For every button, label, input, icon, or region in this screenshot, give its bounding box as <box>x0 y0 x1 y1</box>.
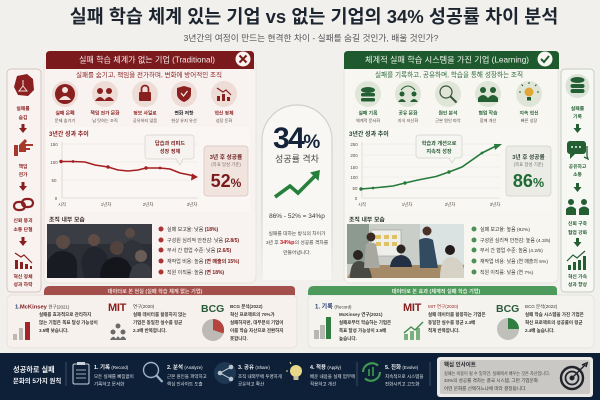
label: hiding: 실패를 <box>16 105 30 112</box>
icon: hiding failure <box>14 74 34 96</box>
label: stagnation: 성과 하락 <box>14 281 33 288</box>
label: share: 소통 <box>573 171 582 178</box>
study: MIT: 2.3배 반복합니다. <box>133 327 167 334</box>
banner: learning <box>308 286 557 295</box>
stat card: 86%: 86% <box>513 171 544 191</box>
insight box: 핵심 인사이트 <box>444 360 476 368</box>
principle 5: evolve: 지속적으로 시스템을 <box>385 373 424 380</box>
label: innovation: 성과 향상 <box>568 281 588 288</box>
callout: learning growth: 학습과 개선으로 <box>422 139 457 147</box>
icon: rising arrow <box>275 170 320 197</box>
principle 3: share: 3. 공유 (Share) <box>238 364 270 371</box>
arrow <box>19 124 27 133</box>
arrow <box>574 183 582 192</box>
callout: traditional stagnation: 답습과 리피드 <box>155 139 185 147</box>
label: blame: 전가 <box>19 171 28 178</box>
formula: 86% - 52% = 34%p <box>269 213 325 220</box>
icon labels: traditional: 공유하지 않음 <box>133 117 157 124</box>
explanation: 실패를 대하는 방식의 차이가 <box>269 230 326 237</box>
title: 실패 학습 체계 있는 기업 vs 없는 기업의 34% 성공률 차이 분석 <box>70 6 558 27</box>
label: stagnation: 혁신 정체 <box>14 273 32 280</box>
icon labels: learning: 지속 혁신 <box>520 110 538 116</box>
study: McKinsey: 높습니다. <box>339 335 357 342</box>
study: McKinsey: 않는 기업은 목표 달성 가능성이 <box>39 319 98 326</box>
stat card: 52%: (목표 달성 기준) <box>211 161 241 168</box>
data panel: traditional <box>7 286 297 348</box>
study: BCG: BCG 분석(2022) <box>230 303 263 310</box>
label: hiding: 숨김 <box>19 114 27 121</box>
label: share: 공유하고 <box>569 163 587 170</box>
icon labels: learning: 공유 문화 <box>398 110 418 116</box>
label: trust breakdown: 신뢰 붕괴 <box>14 217 32 224</box>
list: learning indicators: 부서 간 협업 수준: 높음 (4.2/5) <box>480 247 543 254</box>
study: McKinsey: 1. 기록 (Record) <box>315 302 352 310</box>
icon labels: learning: 협업 학습 <box>478 110 498 116</box>
study: McKinsey: 실패를 효과적으로 관리하지 <box>39 311 91 318</box>
chart: learning performance: 50 <box>353 186 358 191</box>
icon: two people <box>566 199 589 215</box>
icon labels: learning: 지식 자산화 <box>398 117 418 124</box>
chart: learning performance: 100 <box>350 175 358 180</box>
list: traditional indicators: 실패 보고율: 낮음 (18%) <box>167 226 218 233</box>
banner: traditional: 데이터로 본 현실 (실패 학습 체계 없는 기업) <box>108 287 203 295</box>
tagline: 실패를 숨기고, 책임을 전가하며, 변화에 방어적인 조직 <box>76 70 222 79</box>
study: McKinsey: McKinsey 연구(2021) <box>339 311 383 318</box>
list: traditional indicators: 재작업 비용: 높음 (연 매출의 15%) <box>167 258 240 265</box>
icon labels: learning: 근본 원인 파악 <box>435 117 461 124</box>
icon labels: traditional <box>55 110 234 124</box>
principle 4: apply: 4. 적용 (Apply) <box>310 363 342 371</box>
footer title: 성공하로 실패 <box>13 365 55 374</box>
center: success gap arch <box>262 105 332 280</box>
label: blame: 책임 <box>19 163 27 170</box>
chart: learning performance: 1년차 <box>402 201 412 208</box>
banner: learning: 데이터로 본 효과 (체계적 실패 학습 기업) <box>392 287 481 295</box>
chart: learning performance: 2년차 <box>445 201 455 208</box>
big number 34%: 34% <box>273 122 320 155</box>
study: McKinsey <box>13 304 98 340</box>
icon labels: learning: 체계적 문서화 <box>356 117 380 124</box>
stat card: 52%: 3년 후 성공률 <box>210 153 242 161</box>
principle 2: analyze: 근본 원인을 파악하고 <box>167 373 207 380</box>
arrow <box>574 238 582 247</box>
callout: traditional stagnation <box>145 135 194 165</box>
study: McKinsey: 실패로부터 학습하는 기업은 <box>339 319 391 326</box>
insight box: 어떤 문화를 선택하느냐에 따라 결정됩니다. <box>444 385 526 392</box>
chart: traditional performance: 150 <box>50 142 58 147</box>
insight box: 실패는 비용이 될 수 있지만, 실패에서 배우는 것은 자산입니다. <box>444 370 550 377</box>
list: traditional indicators <box>158 226 240 276</box>
principle 2: analyze: 2. 분석 (Analyze) <box>167 363 203 371</box>
panel: traditional company <box>44 51 256 283</box>
principle 5: evolve <box>363 363 424 388</box>
panel header: traditional <box>46 51 254 69</box>
study: McKinsey: 1.McKinsey 연구(2021) <box>15 304 70 310</box>
callout: learning growth <box>416 135 462 163</box>
data panel: learning <box>308 286 594 348</box>
label: trust breakdown: 소통 단절 <box>14 226 33 233</box>
icon labels: traditional: 정보 사일로 <box>133 110 157 116</box>
chart: traditional performance: 3년간 성과 추이 <box>49 130 89 138</box>
principle 1: record: 1. 기록 (Record) <box>94 363 129 371</box>
callout: traditional stagnation: 성장 정체 <box>160 147 180 155</box>
chart: traditional performance: 1년차 <box>101 201 111 208</box>
icon labels: traditional: 실패 은폐 <box>56 110 75 116</box>
study: McKinsey: 3.5배 낮습니다. <box>39 327 68 334</box>
icon: target <box>561 363 587 389</box>
footer title: 문화의 5가지 원칙 <box>13 376 61 385</box>
chart: learning performance: 시작 <box>358 201 366 208</box>
principle 3: share: 공유하고 확산 <box>238 380 264 388</box>
chart: learning performance: 150 <box>350 165 358 170</box>
label: trust breakdown <box>14 217 33 233</box>
icon: chat bubbles <box>567 141 588 159</box>
footer title <box>13 365 61 385</box>
principle 3: share: 조직 내외부에 투명하게 <box>238 373 282 380</box>
photo: stressed team <box>47 224 152 278</box>
section: learning organization <box>347 216 551 278</box>
principle 1: record: 기록하고 문서화 <box>94 380 124 388</box>
principle 2: analyze: 핵심 인사이트 도출 <box>167 380 203 388</box>
chart: traditional performance: 3년차 <box>187 201 197 208</box>
icon labels: traditional: 남 탓하는 조직 <box>92 117 118 124</box>
study: BCG: 혁신 프로젝트의 성공률이 평균 <box>525 319 583 326</box>
icon labels: learning <box>356 110 538 124</box>
list: traditional indicators: 부서 간 협업 수준: 낮음 (2.6/5) <box>167 247 232 254</box>
arrow <box>19 182 27 191</box>
study: BCG <box>201 303 283 342</box>
icon labels: traditional: 변화 저항 <box>174 110 194 116</box>
study: MIT: 동일한 실수를 평균 2.3배 <box>428 319 475 326</box>
icon labels: learning: 실패 기록 <box>358 110 378 116</box>
explanation <box>266 230 329 256</box>
study: BCG: BCG <box>496 303 519 315</box>
chart: learning performance: 3년간 성과 추이 <box>349 130 389 138</box>
icon: database <box>566 74 590 98</box>
study: MIT: 적게 반복합니다. <box>428 327 459 334</box>
principle 2: analyze <box>144 362 207 388</box>
panel header: traditional: 실패 학습 체계가 없는 기업 (Traditional) <box>79 54 215 64</box>
list: traditional indicators: 구성원 심리적 안전감: 낮음 (2.8/5) <box>167 237 239 244</box>
section: traditional organization <box>47 216 240 278</box>
principle 1: record <box>73 362 134 388</box>
study: MIT <box>108 302 186 340</box>
study: MIT: MIT 연구(2020) <box>428 303 459 310</box>
icon labels: traditional: 문제 숨기기 <box>55 117 75 124</box>
photo: collaborating team <box>347 224 464 278</box>
icon: declining chart <box>15 253 32 269</box>
study: MIT: 기업은 동일한 실수를 평균 <box>133 319 182 326</box>
study: McKinsey <box>314 302 391 342</box>
chart: learning performance: 200 <box>350 153 358 158</box>
subtitle: 3년간의 여정이 만드는 현격한 차이 - 실패를 숨길 것인가, 배울 것인가? <box>184 32 439 43</box>
arrow <box>574 124 582 133</box>
stat card: 86% <box>506 146 551 196</box>
label: trust <box>568 220 588 236</box>
study: BCG: 실패 학습 시스템을 가진 기업은 <box>525 311 584 318</box>
label: share <box>569 163 587 178</box>
icon row: traditional traits <box>52 81 237 107</box>
study: McKinsey: 목표 달성 가능성이 3.5배 <box>339 327 386 334</box>
label: stagnation <box>14 273 33 288</box>
study: BCG: BCG 분석(2022) <box>525 303 558 310</box>
stat card: 86%: 3년 후 성공률 <box>512 153 545 161</box>
study: BCG: 혁신 프로젝트의 70%가 <box>230 311 275 318</box>
label: trust: 신뢰 구축 <box>568 220 588 227</box>
principle 4: apply: 배운 내용을 실제 업무에 <box>310 373 355 380</box>
study: BCG: 실패하지만, 대부분의 기업이 <box>230 319 283 326</box>
section: traditional organization: 조직 내부 모습 <box>49 216 85 224</box>
icon: broken chain <box>14 199 33 210</box>
study: BCG: 이를 학습 자산으로 전환하지 <box>230 327 283 334</box>
section: learning organization: 조직 내부 모습 <box>349 216 385 224</box>
icon labels: learning: 함께 개선 <box>480 117 496 124</box>
list: learning indicators: 실패 보고율: 높음 (92%) <box>480 226 530 233</box>
study: MIT: MIT <box>403 302 422 314</box>
icon labels: traditional: 혁신 정체 <box>214 110 234 116</box>
study: BCG <box>496 303 584 340</box>
study: BCG: BCG <box>201 303 224 315</box>
label: gap: 성공률 격차 <box>275 153 320 164</box>
study: MIT: MIT <box>108 302 127 314</box>
chart: learning performance: 250 <box>350 142 358 147</box>
principle 4: apply: 적용하고 개선 <box>310 380 336 388</box>
icon labels: learning: 빠른 성장 <box>521 117 537 124</box>
label: innovation: 혁신 가속 <box>568 273 588 280</box>
side column: learning path <box>561 69 594 292</box>
study: MIT <box>403 302 486 340</box>
callout: learning growth: 지속적 성장 <box>426 147 452 155</box>
icon row: learning traits <box>355 81 542 107</box>
study: MIT: 실패 데이터를 활용하지 않는 <box>133 311 186 318</box>
icon labels: traditional: 성장 둔화 <box>216 117 232 124</box>
stat card: 52% <box>204 146 248 196</box>
principle 1: record: 모든 실패를 빠짐없이 <box>94 373 134 380</box>
arrow <box>19 237 27 246</box>
study: BCG: 못합니다. <box>230 335 248 342</box>
chart: learning performance: 3년차 <box>490 201 500 208</box>
panel header: learning <box>344 51 559 69</box>
chart: traditional performance: 50 <box>52 178 57 183</box>
principle 4: apply <box>286 362 355 388</box>
chart: traditional performance: 시작 <box>58 201 66 208</box>
study: MIT: 연구(2020) <box>133 303 155 310</box>
chart: learning performance: 0 <box>355 196 358 201</box>
principle 5: evolve: 5. 진화 (Evolve) <box>385 363 419 371</box>
principle 3: share <box>214 362 282 388</box>
icon labels: traditional: 현상 유지 유선 <box>171 117 197 124</box>
explanation: 만들어냅니다. <box>283 249 311 256</box>
chart: traditional performance: 0 <box>55 196 58 201</box>
insight box: 34%의 성공률 격차는 결국 시스템, 그런 기업문화 <box>444 377 539 384</box>
list: learning indicators: 구성원 심리적 안전감: 높음 (4.3/5) <box>480 237 551 244</box>
explanation: 3년 후 34%p의 성공률 격차를 <box>266 239 329 246</box>
icon: rising chart <box>567 251 586 270</box>
list: traditional indicators: 직원 이직률: 높음 (연 18%) <box>167 269 224 276</box>
study: BCG: 2.4배 높습니다. <box>525 327 554 334</box>
panel: learning company <box>344 51 559 283</box>
label: record <box>571 105 585 120</box>
list: learning indicators: 직원 이직률: 낮음 (연 7%) <box>480 269 533 276</box>
label: innovation <box>568 273 588 288</box>
side column: failure path <box>7 69 41 292</box>
label: blame <box>19 163 28 178</box>
chart: traditional performance <box>46 127 250 212</box>
label: record: 기록 <box>573 113 582 120</box>
chart: traditional performance: 2년차 <box>143 201 153 208</box>
list: learning indicators: 재작업 비용: 낮음 (연 매출의 5%) <box>480 258 548 265</box>
stat card: 52%: 52% <box>211 171 242 191</box>
icon labels: learning: 원인 분석 <box>438 110 458 116</box>
footer: five principles <box>0 353 600 400</box>
insight box <box>437 357 593 397</box>
banner: traditional <box>44 286 295 295</box>
list: learning indicators <box>472 226 551 276</box>
icon labels: traditional: 책임 전가 문화 <box>90 110 120 116</box>
label: record: 실패를 <box>571 105 585 112</box>
label: hiding <box>16 105 30 121</box>
icon: pointing hand <box>14 139 33 156</box>
stat card: 86%: (목표 달성 기준) <box>514 161 544 168</box>
label: trust: 협업 강화 <box>568 229 588 236</box>
study: MIT: 실패 데이터를 활용하는 기업은 <box>428 311 486 318</box>
panel header: learning: 체계적 실패 학습 시스템을 가진 기업 (Learning) <box>365 54 529 64</box>
chart: traditional performance: 100 <box>50 160 58 165</box>
principle 5: evolve: 진화시키고 고도화 <box>385 380 419 388</box>
tagline: 실패를 기록하고, 공유하며, 학습을 통해 성장하는 조직 <box>375 70 523 79</box>
chart: learning performance <box>346 127 552 212</box>
